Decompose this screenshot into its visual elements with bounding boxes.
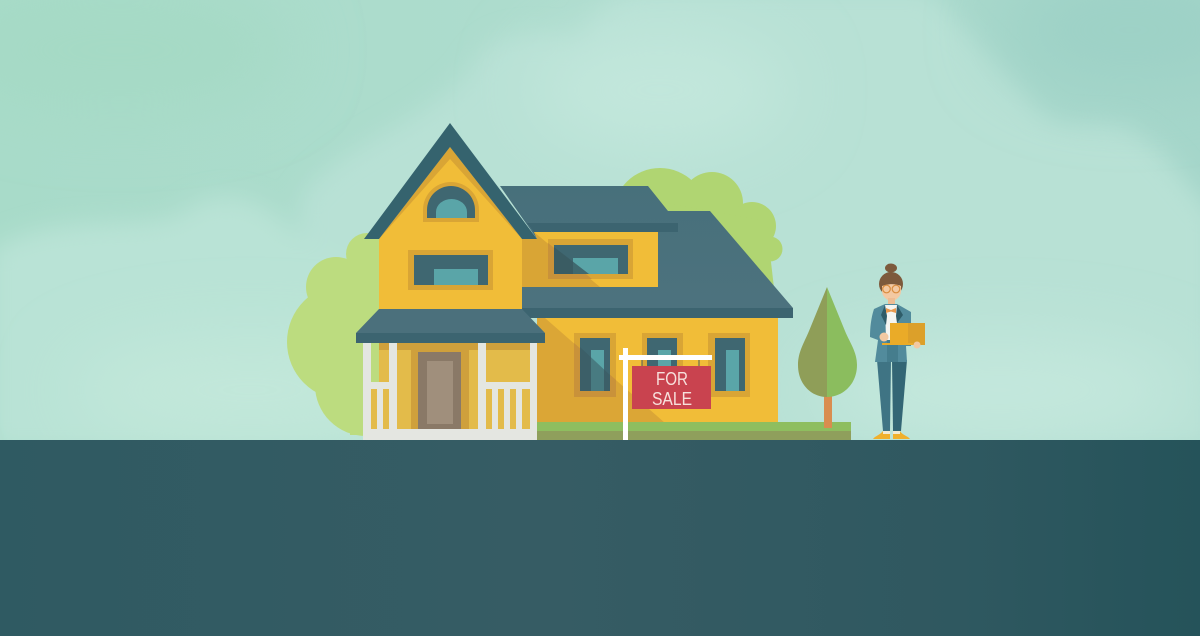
gable trim (379, 147, 522, 239)
dormer eave (527, 223, 678, 232)
sign text (652, 369, 692, 409)
door (418, 352, 461, 430)
door surround (411, 350, 469, 430)
woman with laptop (870, 264, 925, 439)
gable roof (364, 123, 537, 239)
jacket (870, 304, 911, 362)
porch (356, 309, 545, 440)
face (882, 284, 901, 301)
shoes (873, 431, 910, 439)
sign text: FOR (656, 369, 688, 389)
dormer window (548, 239, 633, 279)
window one (574, 333, 616, 397)
arched window (423, 182, 479, 222)
glasses (883, 285, 900, 293)
hand under laptop (914, 342, 920, 348)
hair bun (885, 264, 897, 272)
jacket centre panel (887, 340, 898, 362)
hand on laptop (880, 332, 888, 342)
porch railings and posts (363, 343, 537, 440)
porch back wall (379, 343, 532, 430)
for sale sign (619, 348, 712, 440)
ground (0, 440, 1200, 636)
neck (888, 298, 895, 306)
house (356, 123, 793, 440)
porch wall under rail (371, 389, 379, 430)
tree (798, 287, 857, 428)
left bush (287, 233, 417, 436)
lawn (537, 422, 851, 440)
sign text: SALE (652, 389, 692, 409)
bow tie (886, 308, 896, 313)
laptop (882, 323, 925, 345)
window two (642, 333, 683, 397)
legs (877, 360, 907, 431)
gable window (408, 250, 493, 290)
porch roof (356, 309, 545, 343)
dormer wall shadow (522, 232, 600, 287)
lapels (881, 305, 903, 325)
lower wall (537, 318, 778, 423)
lower wall shadow (537, 318, 665, 423)
window three (708, 333, 750, 397)
shirt (885, 305, 897, 340)
hair (879, 272, 903, 296)
upper dormer roof (500, 186, 793, 318)
right bush (613, 168, 782, 300)
dormer wall (522, 232, 658, 287)
main roof eave (522, 308, 793, 318)
background: sky with clouds (0, 0, 1200, 450)
porch eave (356, 333, 545, 343)
gable wall (379, 147, 522, 309)
porch shade (379, 343, 532, 350)
